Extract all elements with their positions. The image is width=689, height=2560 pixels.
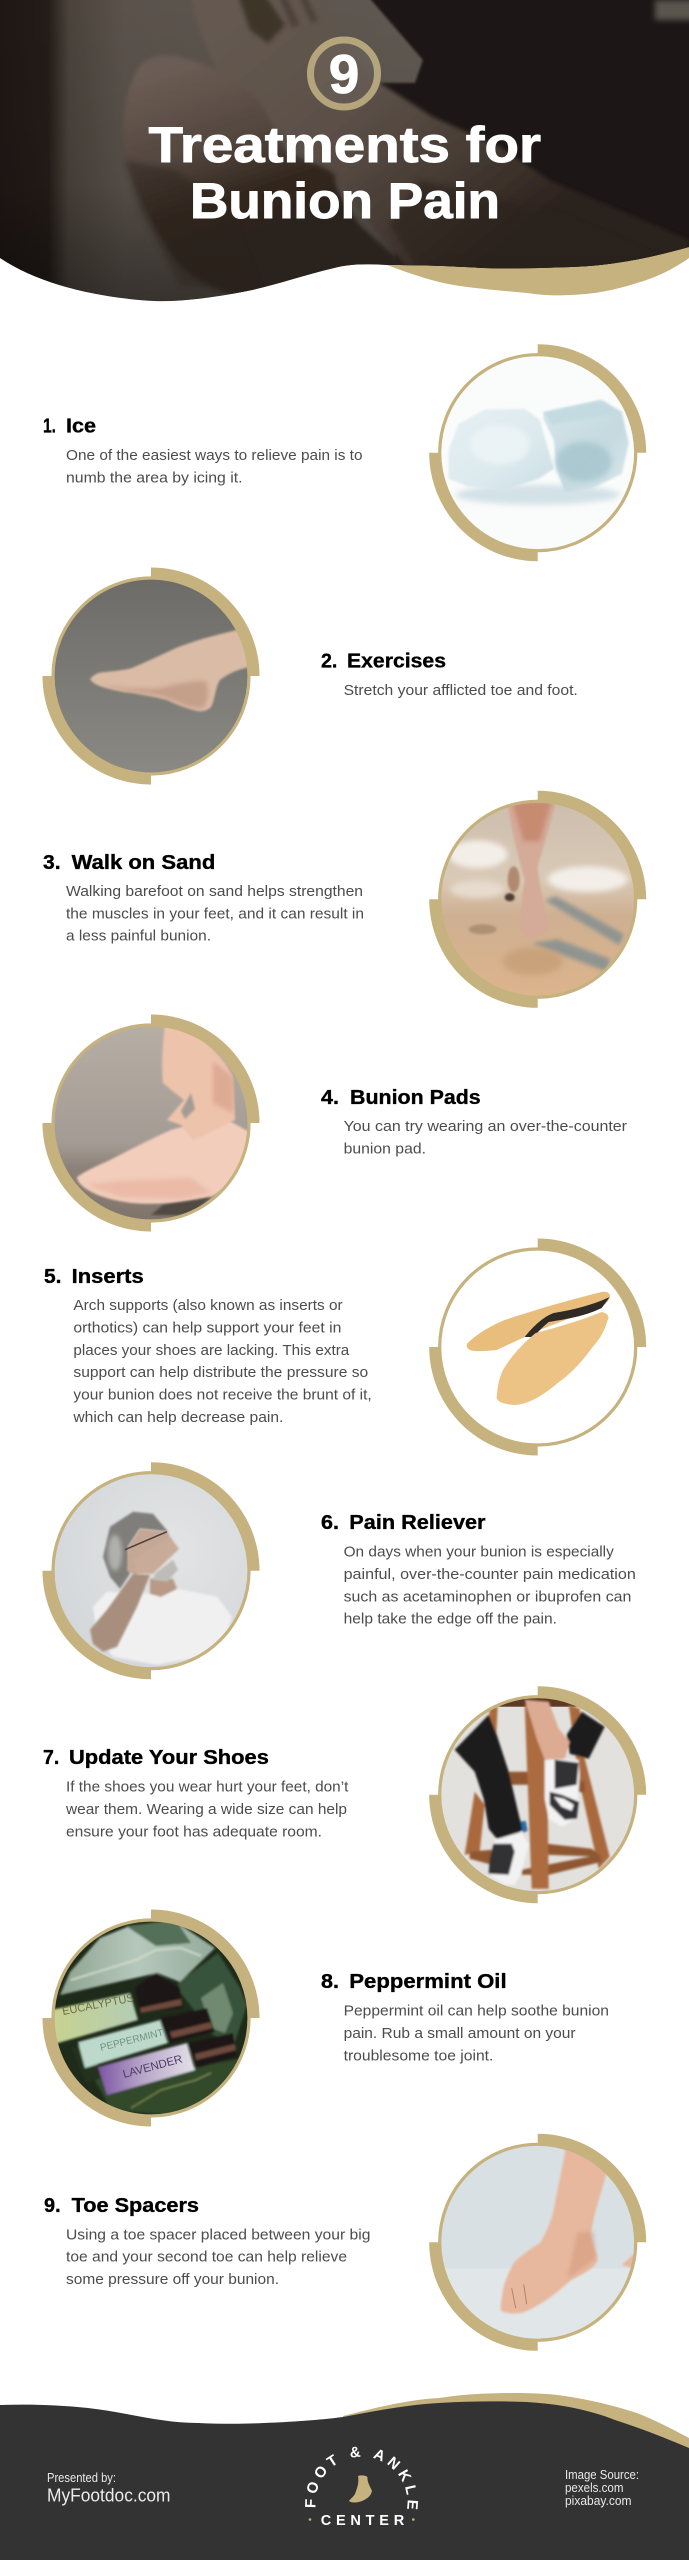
description: Bunion Pads [344,1118,627,1158]
heading: Ice [43,416,96,438]
item 5: Inserts [44,1238,646,1456]
heading: Pain Reliever: 6. [321,1512,339,1534]
header gold wave accent [387,247,689,295]
photo: essential oil rollers: EUCALYPTUS [61,1992,135,2018]
description: Toe Spacers: toe and your second toe can help relieve [66,2249,347,2266]
description: Peppermint Oil: troublesome toe joint. [344,2047,493,2064]
description: Bunion Pads: You can try wearing an over-the-counter [344,1118,627,1135]
heading: Bunion Pads: 4. [321,1087,339,1109]
description: Walk on Sand [66,883,364,945]
description: Toe Spacers: Using a toe spacer placed between your big [66,2226,370,2243]
description: Update Your Shoes: If the shoes you wear hurt your feet, don’t [66,1779,349,1796]
footer gold wave accent [343,2393,689,2460]
presented by [47,2471,170,2506]
item 1: Ice [43,344,646,561]
title [148,117,541,229]
title: Treatments for [148,117,541,173]
description: Walk on Sand: the muscles in your feet, and it can result in [66,905,364,922]
header photo of feet [0,0,689,305]
photo: essential oil rollers: LAVENDER [122,2053,184,2081]
item 8: Peppermint Oil [42,1910,609,2126]
item 6: Pain Reliever [42,1462,636,1679]
heading: Inserts [44,1266,144,1288]
item 3: Walk on Sand [43,791,646,1008]
photo: raised foot [42,568,260,784]
heading: Walk on Sand: 3. [43,852,61,874]
logo: Foot & Ankle Center: CENTER [321,2513,405,2529]
photo: bare foot on mat [429,2134,646,2351]
heading: Exercises: 2. [321,651,337,673]
description: Exercises: Stretch your afflicted toe and foot. [344,682,578,699]
description: Peppermint Oil [344,2003,609,2064]
item 7: Update Your Shoes [43,1686,646,1903]
description: Toe Spacers [66,2226,370,2288]
heading: Peppermint Oil: Peppermint Oil [349,1971,507,1993]
heading: Update Your Shoes: 7. [43,1747,59,1769]
heading: Ice: Ice [66,416,96,438]
description: Inserts: support can help distribute the pressure so [73,1364,368,1381]
description: Toe Spacers: some pressure off your bunion. [66,2271,279,2288]
heading: Toe Spacers: Toe Spacers [72,2195,199,2217]
image source: Image Source: [565,2468,639,2482]
description: Inserts [72,1297,372,1426]
photo: essential oil rollers: PEPPERMINT [99,2028,165,2054]
description: Inserts: which can help decrease pain. [72,1409,283,1426]
heading: Inserts: 5. [44,1266,62,1288]
heading: Walk on Sand: Walk on Sand [72,852,215,874]
description: Update Your Shoes: wear them. Wearing a wide size can help [65,1801,347,1818]
logo: Foot & Ankle Center: FOOT & ANKLE [305,2446,418,2510]
description: Inserts: your bunion does not receive the brunt of it, [73,1387,372,1404]
photo: man in pain [42,1462,260,1679]
description: Peppermint Oil: pain. Rub a small amount on your [344,2025,576,2042]
description: Ice: One of the easiest ways to relieve pain is to [66,447,362,464]
photo: fingers on foot [42,1014,260,1232]
photo: orthotic insoles [429,1238,646,1456]
description: Pain Reliever: such as acetaminophen or ibuprofen can [344,1588,631,1605]
description: Inserts: places your shoes are lacking. This extra [73,1342,350,1359]
badge: number 9 [310,40,378,107]
header banner [0,0,689,305]
image source [565,2468,639,2508]
description: Pain Reliever: painful, over-the-counter pain medication [344,1566,636,1583]
heading: Inserts: Inserts [72,1266,144,1288]
photo: sneakers on stool [429,1686,646,1903]
item 4: Bunion Pads [42,1014,627,1232]
heading: Exercises: Exercises [347,651,446,673]
description: Inserts: orthotics) can help support your feet in [73,1319,341,1336]
description: Ice: numb the area by icing it. [66,470,243,486]
heading: Bunion Pads: Bunion Pads [350,1087,481,1109]
description: Pain Reliever: On days when your bunion is especially [344,1544,614,1561]
footer [0,2393,689,2560]
icon: foot [349,2475,372,2502]
description: Bunion Pads: bunion pad. [344,1140,426,1158]
heading: Toe Spacers: 9. [44,2195,61,2217]
description: Pain Reliever: help take the edge off the pain. [344,1611,557,1628]
description: Walk on Sand: a less painful bunion. [66,928,211,945]
description: Pain Reliever [344,1544,636,1628]
photo: ice cubes [429,344,646,561]
presented by: MyFootdoc.com [47,2485,170,2506]
image source: pixabay.com [565,2494,632,2508]
title: Bunion Pain [190,173,500,229]
image source: pexels.com [565,2481,624,2495]
footer dark panel [0,2401,689,2560]
photo: walking on sand [429,791,646,1008]
heading: Ice: 1. [43,416,56,438]
photo: essential oil rollers [42,1910,260,2126]
description: Peppermint Oil: Peppermint oil can help soothe bunion [344,2003,609,2020]
heading: Pain Reliever: Pain Reliever [349,1512,486,1534]
heading: Peppermint Oil: 8. [321,1971,339,1993]
heading: Update Your Shoes: Update Your Shoes [69,1747,269,1769]
description: Update Your Shoes: ensure your foot has adequate room. [66,1823,322,1840]
badge: number 9: 9 [329,43,359,105]
description: Inserts: Arch supports (also known as inserts or [73,1297,343,1314]
item 2: Exercises [42,568,578,784]
item 9: Toe Spacers [44,2134,646,2351]
description: Ice [66,447,362,486]
presented by: Presented by: [47,2471,116,2485]
description: Walk on Sand: Walking barefoot on sand helps strengthen [66,883,363,900]
description: Update Your Shoes [65,1779,349,1840]
